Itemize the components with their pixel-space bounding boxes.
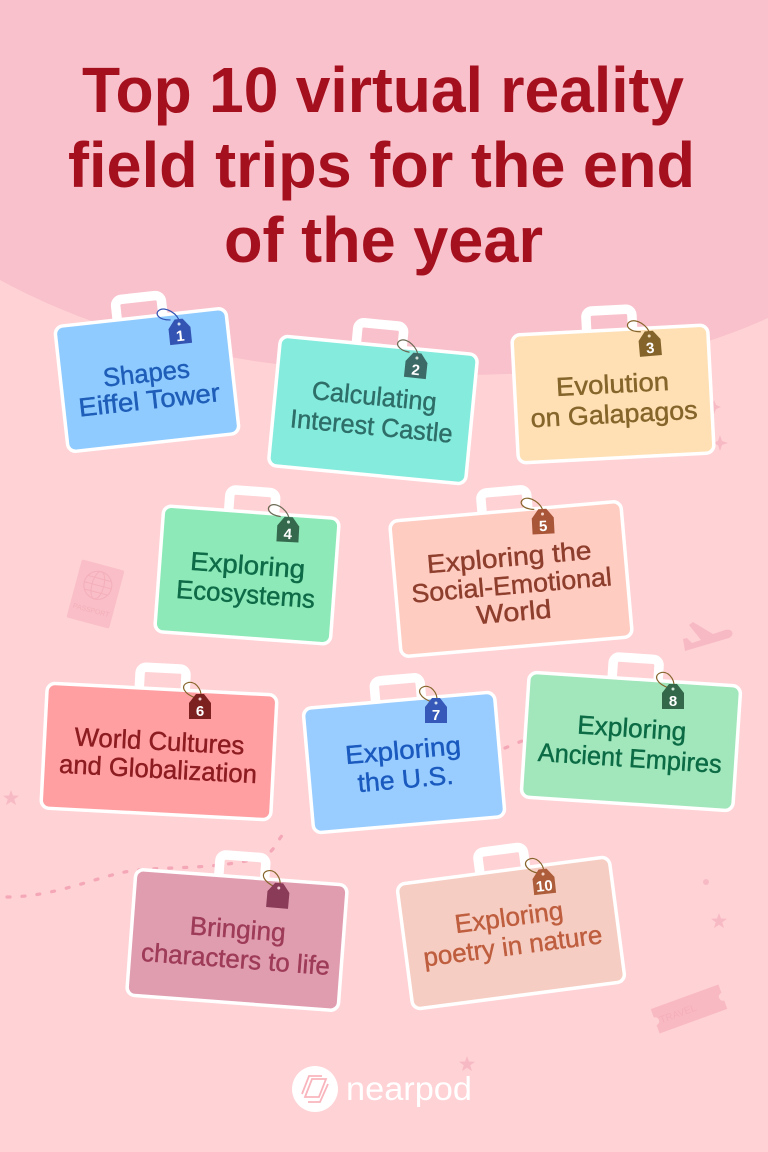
suitcase 8: Ancient Empires: [537, 737, 723, 779]
suitcase 7: the U.S.: [356, 760, 455, 798]
suitcase 10: [394, 836, 625, 1009]
tag 3: 3: [645, 340, 655, 357]
suitcase 6: [41, 662, 278, 820]
suitcase 4: Exploring: [189, 546, 306, 584]
tag 4: 4: [283, 526, 293, 543]
nearpod logo: [292, 1066, 472, 1112]
tag 8: [657, 672, 684, 710]
suitcase 5: Exploring the: [426, 535, 593, 579]
tag 5: [521, 497, 555, 536]
decoration: passport: PASSPORT: [72, 603, 111, 619]
tag 6: [184, 682, 211, 720]
suitcase 2: Calculating: [311, 375, 438, 417]
tag 5: 5: [539, 518, 548, 535]
background arc: [0, 0, 768, 375]
decoration: travel ticket: [651, 984, 727, 1034]
suitcase 2: Interest Castle: [289, 403, 454, 449]
suitcase 2: [268, 315, 480, 484]
tag 10: 10: [535, 877, 554, 896]
tag 1: 1: [175, 328, 185, 345]
tag 3: [627, 319, 662, 359]
suitcase 5: Social-Emotional: [410, 561, 613, 609]
suitcase 7: [301, 671, 505, 833]
suitcase 9: characters to life: [140, 937, 331, 981]
decoration: travel ticket: TRAVEL: [658, 1003, 698, 1026]
suitcase 8: Exploring: [576, 709, 687, 747]
decoration: stars and sparkles: [3, 400, 728, 1071]
suitcase 6: and Globalization: [58, 749, 258, 789]
title: field trips for the end: [68, 129, 695, 201]
decoration: dashed trail: [7, 741, 522, 897]
suitcase 3: on Galapagos: [530, 395, 698, 433]
suitcase 1: [52, 288, 239, 452]
suitcase 7: Exploring: [344, 730, 462, 770]
tag 7: [420, 686, 447, 724]
suitcase 3: Evolution: [555, 366, 670, 402]
tag 2: 2: [411, 362, 421, 379]
suitcase 1: Eiffel Tower: [77, 377, 222, 423]
suitcase 9: [127, 848, 349, 1011]
tag 4: [267, 504, 300, 544]
tag 1: [157, 306, 192, 347]
title: of the year: [224, 204, 543, 276]
tag 9: [261, 870, 291, 909]
suitcase 6: World Cultures: [74, 722, 245, 760]
suitcase 8: [521, 651, 742, 811]
suitcase 3: [511, 305, 714, 463]
decoration: passport: [66, 559, 125, 629]
suitcase 5: [388, 481, 632, 657]
suitcase 10: Exploring: [453, 895, 565, 939]
tag 6: 6: [196, 703, 204, 720]
suitcase 9: Bringing: [189, 910, 287, 948]
title: [68, 54, 695, 276]
tag 10: [525, 856, 556, 897]
suitcase 5: World: [475, 594, 553, 630]
suitcase 1: Shapes: [101, 353, 191, 393]
title: Top 10 virtual reality: [82, 54, 684, 126]
tag 8: 8: [669, 693, 677, 710]
suitcase 4: [155, 485, 341, 644]
suitcase 4: Ecosystems: [175, 574, 316, 614]
tag 7: 7: [432, 707, 440, 724]
nearpod logo: nearpod: [346, 1070, 472, 1107]
decoration: plane: [683, 622, 732, 651]
suitcase 10: poetry in nature: [422, 919, 604, 973]
tag 2: [394, 339, 430, 380]
